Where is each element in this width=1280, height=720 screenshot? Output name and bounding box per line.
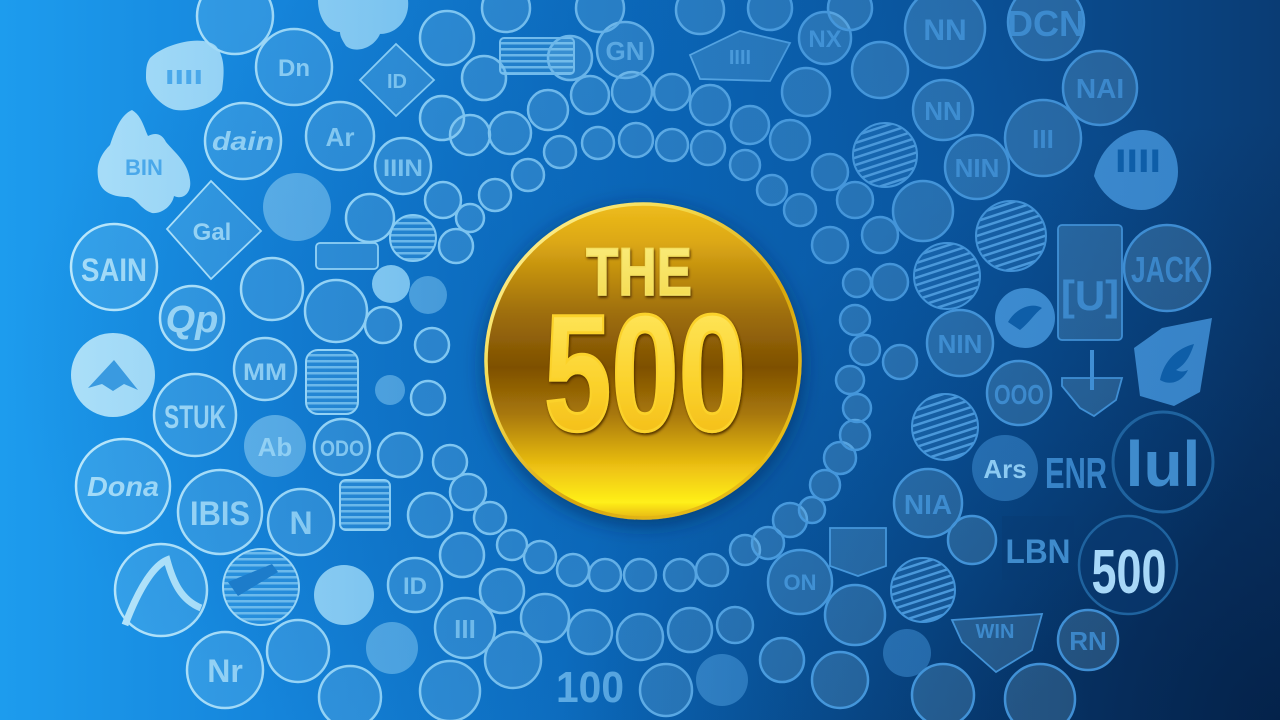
top center logos: [482, 0, 872, 116]
logo: badge speckled: Ars: [983, 454, 1027, 484]
logo group: right mid circles: NIN: [955, 153, 999, 183]
logo group: mid-left circles: [187, 0, 408, 720]
logo group: right mid circles: NN: [924, 96, 962, 126]
top center logos: GN: [606, 36, 644, 66]
logo: Dona: [76, 439, 170, 533]
logo: bottom shapes: ON: [784, 570, 816, 595]
logo group: right mid circles: DCN: [1007, 3, 1085, 44]
bottom center logos: [556, 469, 1075, 720]
label: 100: 100: [556, 663, 624, 712]
logo: LBN: LBN: [1006, 533, 1070, 571]
logo group: mid-left circles: Ab: [258, 432, 292, 462]
logo: filled badge: [71, 333, 155, 417]
logo: cursive: [205, 103, 281, 179]
logo: top-left badge: [146, 41, 224, 110]
logo: diamond: Gal: [193, 219, 231, 246]
logo: flame: [1134, 318, 1212, 406]
logo group: right mid circles: NAI: [1076, 73, 1124, 104]
logo group: mid-left circles: ODO: [320, 436, 364, 461]
logo: pin: [995, 288, 1055, 348]
logo: LBN: [1002, 516, 1074, 580]
right side logos: [852, 0, 1213, 672]
logo: tower mark: [1062, 350, 1122, 416]
logo group: mid-left circles: Nr: [207, 653, 243, 689]
logo: temple: [1094, 130, 1178, 210]
logo: 500 badge: [1079, 516, 1177, 614]
logo group: mid-left circles: Ar: [326, 122, 354, 152]
logo: leaf blob: [98, 110, 190, 213]
logo: diamond top: ID: [387, 71, 407, 93]
logo: JACK: [1124, 225, 1210, 311]
logo: ENR: ENR: [1045, 449, 1107, 498]
logo: IBIS: IBIS: [190, 495, 250, 533]
inner ring of small logos: [439, 56, 917, 688]
logo: SAIN: SAIN: [81, 252, 147, 288]
logo: cursive: dain: [212, 126, 274, 156]
logo group: second ring left: IIIN: [383, 155, 423, 182]
logo group: mid-left circles: Dn: [278, 55, 310, 82]
heading: 500: 500: [544, 281, 746, 466]
logo: lu: [1113, 412, 1213, 512]
logo: script: Qp: [166, 299, 218, 341]
logo: ring: [987, 361, 1051, 425]
coin disc: [486, 204, 800, 518]
logo group: right mid circles: NN: [923, 14, 967, 47]
logo group: right mid circles: III: [1032, 124, 1054, 154]
logo: leaf blob: BIN: [125, 155, 163, 180]
logo: diamond top: [360, 44, 434, 116]
logo: tall box: [1058, 225, 1122, 340]
logo: script: [160, 286, 224, 350]
logo: ribbon: WIN: [976, 621, 1014, 643]
logo: small circle: RN: [1069, 626, 1107, 656]
left mid logos: [187, 0, 495, 720]
logo: stripes badge: [223, 549, 299, 625]
logo: JACK: JACK: [1131, 249, 1203, 290]
logo: bottom shapes: [640, 469, 1075, 720]
logo: badge speckled: [972, 435, 1038, 501]
logo: SAIN: [71, 224, 157, 310]
logo: lu: lul: [1126, 428, 1200, 500]
logo group: mid-left circles: MM: [243, 359, 287, 386]
logo: top-left badge: IIII: [165, 67, 203, 89]
logo: small circle: [1058, 610, 1118, 670]
top center logos: NX: [808, 26, 842, 53]
logo: ring: OOO: [994, 379, 1044, 410]
left outer logos: [71, 41, 299, 636]
logo: swoosh: [115, 544, 207, 636]
logo: diamond: [167, 181, 261, 279]
central gold medallion: [486, 204, 800, 518]
logo: ribbon: [952, 614, 1042, 672]
logo group: mid-left circles: N: [289, 505, 313, 541]
logo group: second ring left: III: [454, 614, 476, 644]
logo: STUK: [154, 374, 236, 456]
logo group: second ring left: [316, 11, 495, 720]
logo: temple: IIII: [1115, 143, 1161, 179]
logo group: right mid circles: [852, 0, 1137, 460]
logo group: second ring left: ID: [403, 573, 427, 600]
logo: IBIS: [178, 470, 262, 554]
logo: bottom shapes: NIA: [904, 489, 952, 520]
logo: STUK: STUK: [164, 399, 226, 435]
logo: Dona: Dona: [87, 471, 159, 502]
heading: THE: THE: [586, 234, 692, 310]
top center logos: IIII: [729, 47, 751, 69]
logo: 500 badge: 500: [1092, 538, 1166, 607]
logo group: right mid circles: NIN: [938, 329, 982, 359]
logo: tall box: [U]: [1061, 272, 1119, 319]
